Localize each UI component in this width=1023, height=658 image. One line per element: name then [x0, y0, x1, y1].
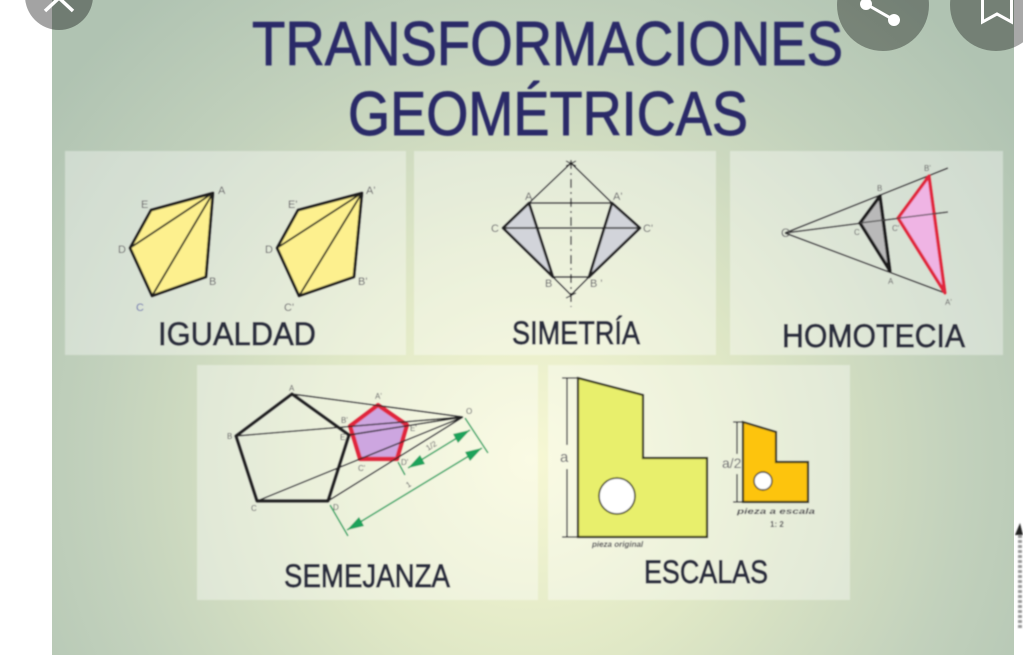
diagram: similar pentagons: E' — [410, 424, 417, 433]
diagram: homothetic triangles: A — [888, 277, 894, 286]
dimension arrows: 1 and 1/2: 1 — [404, 479, 413, 490]
diagram: original piece: pieza original — [591, 540, 644, 549]
diagram: similar pentagons: A — [289, 384, 295, 393]
dimension arrows: 1 and 1/2: 1/2 — [424, 439, 439, 453]
button: share — [837, 0, 929, 51]
panel: escalas — [548, 365, 850, 600]
diagram: homothetic triangles: A' — [945, 298, 952, 307]
icon: pentagon A'B'C'D'E': D — [265, 244, 273, 256]
heading: escalas: ESCALAS — [644, 554, 768, 590]
diagram: homothetic triangles: O — [781, 226, 790, 240]
diagram: similar pentagons: B — [227, 432, 232, 441]
icon: pentagon ABCDE: A — [218, 185, 226, 197]
diagram: similar pentagons: A' — [375, 392, 382, 401]
title — [252, 10, 843, 149]
diagram: similar pentagons: O — [466, 407, 472, 416]
diagram: similar pentagons: B' — [341, 416, 348, 425]
diagram: homothetic triangles: B — [877, 184, 882, 193]
icon: pentagon ABCDE: E — [141, 199, 148, 211]
heading: simetría: SIMETRÍA — [512, 315, 641, 351]
icon: pentagon A'B'C'D'E' — [265, 185, 375, 314]
button: bookmark — [950, 0, 1023, 51]
heading: semejanza: SEMEJANZA — [284, 558, 451, 594]
diagram: homothetic triangles — [781, 164, 952, 307]
diagram: original piece — [560, 378, 707, 549]
diagram: mirrored triangles: A — [525, 191, 533, 203]
icon: pentagon ABCDE: C — [136, 302, 144, 314]
diagram: similar pentagons: E — [340, 433, 345, 442]
diagram: mirrored triangles: B ' — [590, 278, 602, 290]
icon: pentagon A'B'C'D'E': A' — [366, 185, 375, 197]
button: close — [25, 0, 93, 30]
diagram: mirrored triangles: A' — [613, 191, 622, 203]
icon: pentagon A'B'C'D'E': E' — [288, 199, 297, 211]
diagram: scaled piece — [722, 422, 816, 529]
title: GEOMÉTRICAS — [348, 80, 748, 149]
diagram: mirrored triangles — [491, 160, 653, 307]
icon: pentagon ABCDE: B — [209, 276, 216, 288]
diagram: mirrored triangles: B — [545, 278, 552, 290]
diagram: similar pentagons: D — [333, 503, 339, 512]
diagram: similar pentagons: C' — [358, 464, 366, 473]
heading: igualdad: IGUALDAD — [158, 316, 316, 352]
dimension arrows: 1 and 1/2 — [330, 418, 488, 536]
icon: pentagon ABCDE: D — [118, 244, 126, 256]
icon: pentagon A'B'C'D'E': B' — [358, 276, 367, 288]
diagram: mirrored triangles: C — [491, 223, 499, 235]
title: TRANSFORMACIONES — [252, 10, 843, 79]
panel: igualdad — [65, 151, 406, 355]
diagram: similar pentagons: C — [251, 504, 257, 513]
diagram: similar pentagons — [227, 384, 472, 513]
diagram: original piece: a — [560, 449, 569, 466]
diagram: scaled piece: 1: 2 — [770, 520, 784, 529]
diagram: scaled piece: a/2 — [722, 455, 742, 471]
diagram: mirrored triangles: C' — [643, 223, 653, 235]
diagram: homothetic triangles: C — [854, 228, 860, 237]
diagram: homothetic triangles: B' — [924, 164, 931, 173]
diagram: homothetic triangles: C' — [892, 224, 900, 233]
panel: simetría — [414, 151, 716, 355]
panel: semejanza — [197, 365, 538, 600]
diagram: scaled piece: pieza a escala — [736, 507, 816, 516]
icon: pentagon A'B'C'D'E': C' — [284, 302, 294, 314]
icon: pentagon ABCDE — [118, 185, 226, 314]
adjacent sliver: cropped arrow and watermark — [1015, 523, 1023, 628]
heading: homotecia: HOMOTECIA — [782, 318, 966, 354]
panel: homotecia — [730, 151, 1003, 355]
diagram: similar pentagons: D' — [401, 458, 409, 467]
